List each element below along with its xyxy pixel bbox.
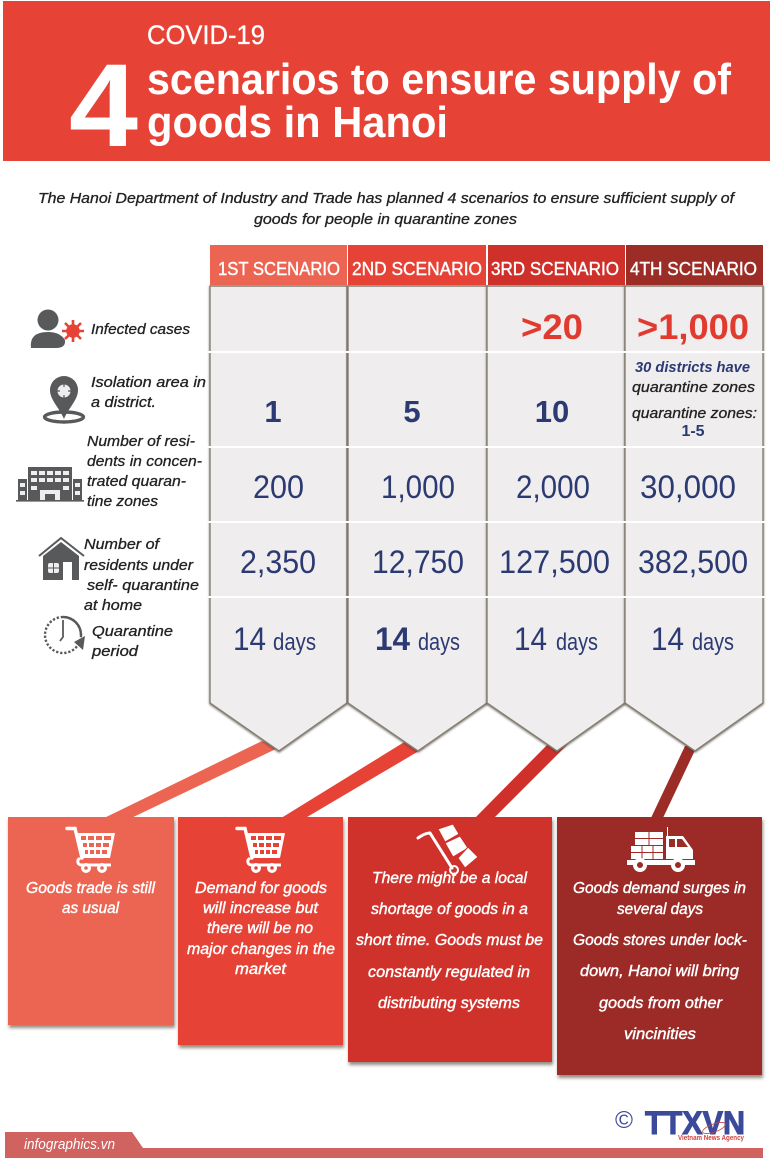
- outcome text: down, Hanoi will bring: [580, 963, 739, 980]
- scenario column 4: 4TH SCENARIO: [630, 259, 757, 279]
- row: quarantine period: 14: [514, 621, 547, 657]
- outcome text: will increase but: [203, 900, 319, 917]
- scenario 4 value: >1,000: [637, 308, 749, 347]
- icon: shopping cart: [237, 828, 285, 873]
- icon: delivery truck: [627, 827, 695, 872]
- row: residents under self-quarantine: 382,500: [638, 544, 748, 580]
- header banner: [3, 1, 770, 172]
- connector: scenario 2 to outcome 2: [278, 741, 424, 820]
- outcome text: several days: [617, 901, 703, 918]
- row: quarantine period: period: [91, 643, 139, 660]
- scenario values: 200: [253, 469, 304, 505]
- row: quarantine period: 14: [375, 621, 410, 657]
- tagline: Vietnam News Agency: [678, 1133, 745, 1142]
- outcome text: There might be a local: [372, 870, 528, 887]
- row: residents in concentrated zones: tine zones: [87, 493, 159, 510]
- agency logo: [615, 1105, 745, 1142]
- scenario column 3: 3RD SCENARIO: [491, 259, 619, 279]
- scenario column 3: [487, 245, 625, 751]
- connector: scenario 1 to outcome 1: [100, 741, 278, 820]
- outcome text: goods from other: [599, 995, 723, 1012]
- globe ring: [701, 1120, 727, 1136]
- intro text: goods for people in quarantine zones: [254, 211, 518, 228]
- icon: house: [39, 538, 84, 580]
- outcome text: Goods trade is still: [26, 880, 156, 897]
- outcome text: vincinities: [624, 1026, 696, 1043]
- row: residents under self-quarantine: 12,750: [372, 544, 464, 580]
- overline: COVID-19: COVID-19: [147, 20, 265, 50]
- outcome text: constantly regulated in: [368, 964, 530, 981]
- row: residents in concentrated zones: 30,000: [640, 469, 736, 505]
- wordmark: TTXVN: [645, 1105, 745, 1141]
- row: residents under self-quarantine: 127,500: [499, 544, 610, 580]
- outcome text: shortage of goods in a: [371, 901, 528, 918]
- scenario column 1: 1ST SCENARIO: [218, 259, 340, 279]
- outcome text: distributing systems: [378, 995, 520, 1012]
- title line 2: goods in Hanoi: [147, 98, 448, 147]
- scenario column 1: [210, 245, 347, 751]
- column heading: [348, 245, 486, 285]
- scenario 4 note: quarantine zones:: [632, 405, 757, 422]
- connector: scenario 3 to outcome 3: [473, 744, 568, 820]
- row: quarantine period: days: [418, 629, 460, 656]
- icon: shopping cart: [67, 828, 115, 873]
- intro text: [38, 190, 736, 228]
- label: Quarantine: [92, 623, 173, 640]
- icon: person with virus: [31, 310, 84, 348]
- scenario values: days: [273, 629, 316, 656]
- row: residents in concentrated zones: [16, 433, 736, 510]
- big numeral 4: 4: [69, 40, 138, 172]
- row: residents in concentrated zones: 2,000: [516, 469, 590, 505]
- outcome text: [356, 870, 543, 1012]
- row: residents under self-quarantine: at home: [84, 597, 142, 614]
- row: isolation areas: 5: [403, 394, 421, 429]
- copyright mark: ©: [615, 1107, 633, 1134]
- scenario 4 note: 30 districts have: [635, 359, 750, 376]
- scenario values: 1: [264, 394, 282, 429]
- row: infected cases: [31, 308, 749, 348]
- footer bar: [5, 1132, 763, 1158]
- row: residents in concentrated zones: dents in concen-: [87, 453, 202, 470]
- scenario 4 note: 1-5: [681, 423, 705, 440]
- scenario column 4: [625, 245, 763, 751]
- scenario 3 value: >20: [521, 308, 583, 347]
- row: residents under self-quarantine: self- quarantine: [87, 577, 199, 594]
- scenario values: 14: [233, 621, 266, 657]
- outcome text: [187, 880, 335, 978]
- row: residents under self-quarantine: residents under: [84, 557, 194, 574]
- scenario values: 2,350: [240, 544, 316, 580]
- row: residents under self-quarantine: [39, 536, 748, 614]
- row: quarantine period: days: [556, 629, 598, 656]
- label: Infected cases: [91, 321, 191, 338]
- outcome text: [573, 880, 747, 1043]
- icon: clock: [45, 617, 85, 653]
- outcome panel 4: [557, 817, 762, 1075]
- row: isolation areas: a district.: [91, 394, 156, 411]
- row: quarantine period: 14: [651, 621, 684, 657]
- icon: map pin: [44, 376, 84, 422]
- icon: hand truck with boxes: [418, 824, 478, 874]
- icon: building: [16, 467, 84, 502]
- scenario column 2: [348, 245, 487, 751]
- column heading: [488, 245, 625, 285]
- outcome text: Goods demand surges in: [573, 880, 746, 897]
- row: isolation areas: 10: [535, 394, 569, 429]
- row: quarantine period: [45, 617, 734, 660]
- outcome text: there will be no: [207, 920, 313, 937]
- column heading: [626, 245, 763, 285]
- outcome text: [26, 880, 156, 917]
- connector: scenario 4 to outcome 4: [650, 746, 697, 820]
- row: residents in concentrated zones: trated quaran-: [87, 473, 186, 490]
- label: Isolation area in: [91, 374, 206, 391]
- outcome text: Goods stores under lock-: [573, 932, 747, 949]
- outcome panel 2: [178, 817, 343, 1045]
- row: isolation areas: [44, 359, 757, 440]
- title line 1: scenarios to ensure supply of: [147, 55, 731, 104]
- outcome text: major changes in the: [187, 941, 335, 958]
- outcome text: Demand for goods: [195, 880, 327, 897]
- outcome panel 1: [8, 817, 174, 1025]
- label: Number of resi-: [87, 433, 195, 450]
- outcome text: market: [235, 961, 287, 978]
- footer source text: infographics.vn: [24, 1137, 115, 1153]
- label: Number of: [84, 536, 161, 553]
- scenario values: [233, 621, 316, 657]
- row: residents in concentrated zones: 1,000: [381, 469, 455, 505]
- column heading: [210, 245, 347, 285]
- scenario column 2: 2ND SCENARIO: [352, 259, 482, 279]
- outcome panel 3: [348, 817, 552, 1062]
- scenario 4 note: [632, 359, 757, 440]
- outcome text: as usual: [62, 900, 120, 917]
- outcome text: short time. Goods must be: [356, 932, 543, 949]
- scenario 4 note: quarantine zones: [632, 379, 756, 396]
- intro text: The Hanoi Department of Industry and Trade has planned 4 scenarios to ensure sufficient supply of: [38, 190, 736, 207]
- row: quarantine period: days: [692, 629, 734, 656]
